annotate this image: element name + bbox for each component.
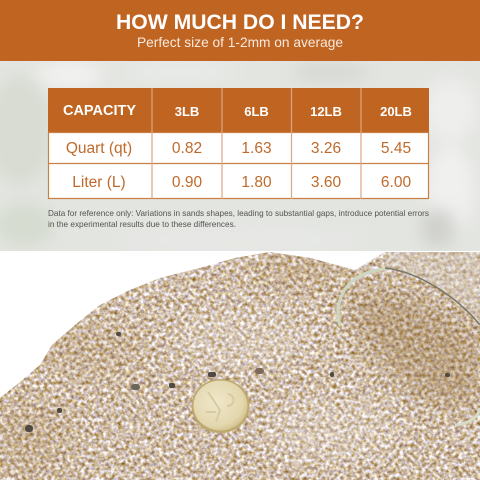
table header row: [48, 88, 429, 132]
sand pile: [0, 251, 480, 480]
glass jar: [338, 252, 480, 425]
row: quart: 0.82: [172, 140, 202, 157]
header: 12LB: 12LB: [310, 104, 342, 119]
row: quart: [66, 140, 411, 157]
row: liter: [72, 174, 411, 191]
disclaimer note: in the experimental results due to these differences.: [48, 219, 236, 229]
header: capacity: CAPACITY: [63, 103, 136, 119]
row: quart: 1.63: [241, 140, 272, 157]
header: 3LB: 3LB: [175, 104, 199, 119]
capacity table: [48, 88, 429, 199]
title: HOW MUCH DO I NEED?: [116, 10, 364, 34]
table body: [48, 132, 429, 199]
row: liter: 3.60: [311, 174, 341, 191]
dark specks: [25, 332, 450, 432]
faded succulent background: [0, 61, 480, 254]
row: liter: 0.90: [172, 174, 202, 191]
disclaimer note: Data for reference only: Variations in sands shapes, leading to substantial gaps, introduce potential errors: [48, 208, 429, 218]
row: liter: Liter (L): [72, 174, 126, 191]
disclaimer note: [48, 208, 429, 229]
row: quart: Quart (qt): [66, 140, 132, 157]
row: quart: 3.26: [311, 140, 341, 157]
subtitle: Perfect size of 1-2mm on average: [137, 34, 343, 50]
header: 20LB: 20LB: [380, 104, 412, 119]
row: quart: 5.45: [381, 140, 411, 157]
header band: [0, 0, 480, 61]
sand photo: [0, 251, 480, 480]
coin: [192, 379, 250, 433]
row: liter: 6.00: [381, 174, 411, 191]
header: 6LB: 6LB: [244, 104, 269, 119]
tonal variation: [0, 260, 480, 480]
row: liter: 1.80: [241, 174, 272, 191]
